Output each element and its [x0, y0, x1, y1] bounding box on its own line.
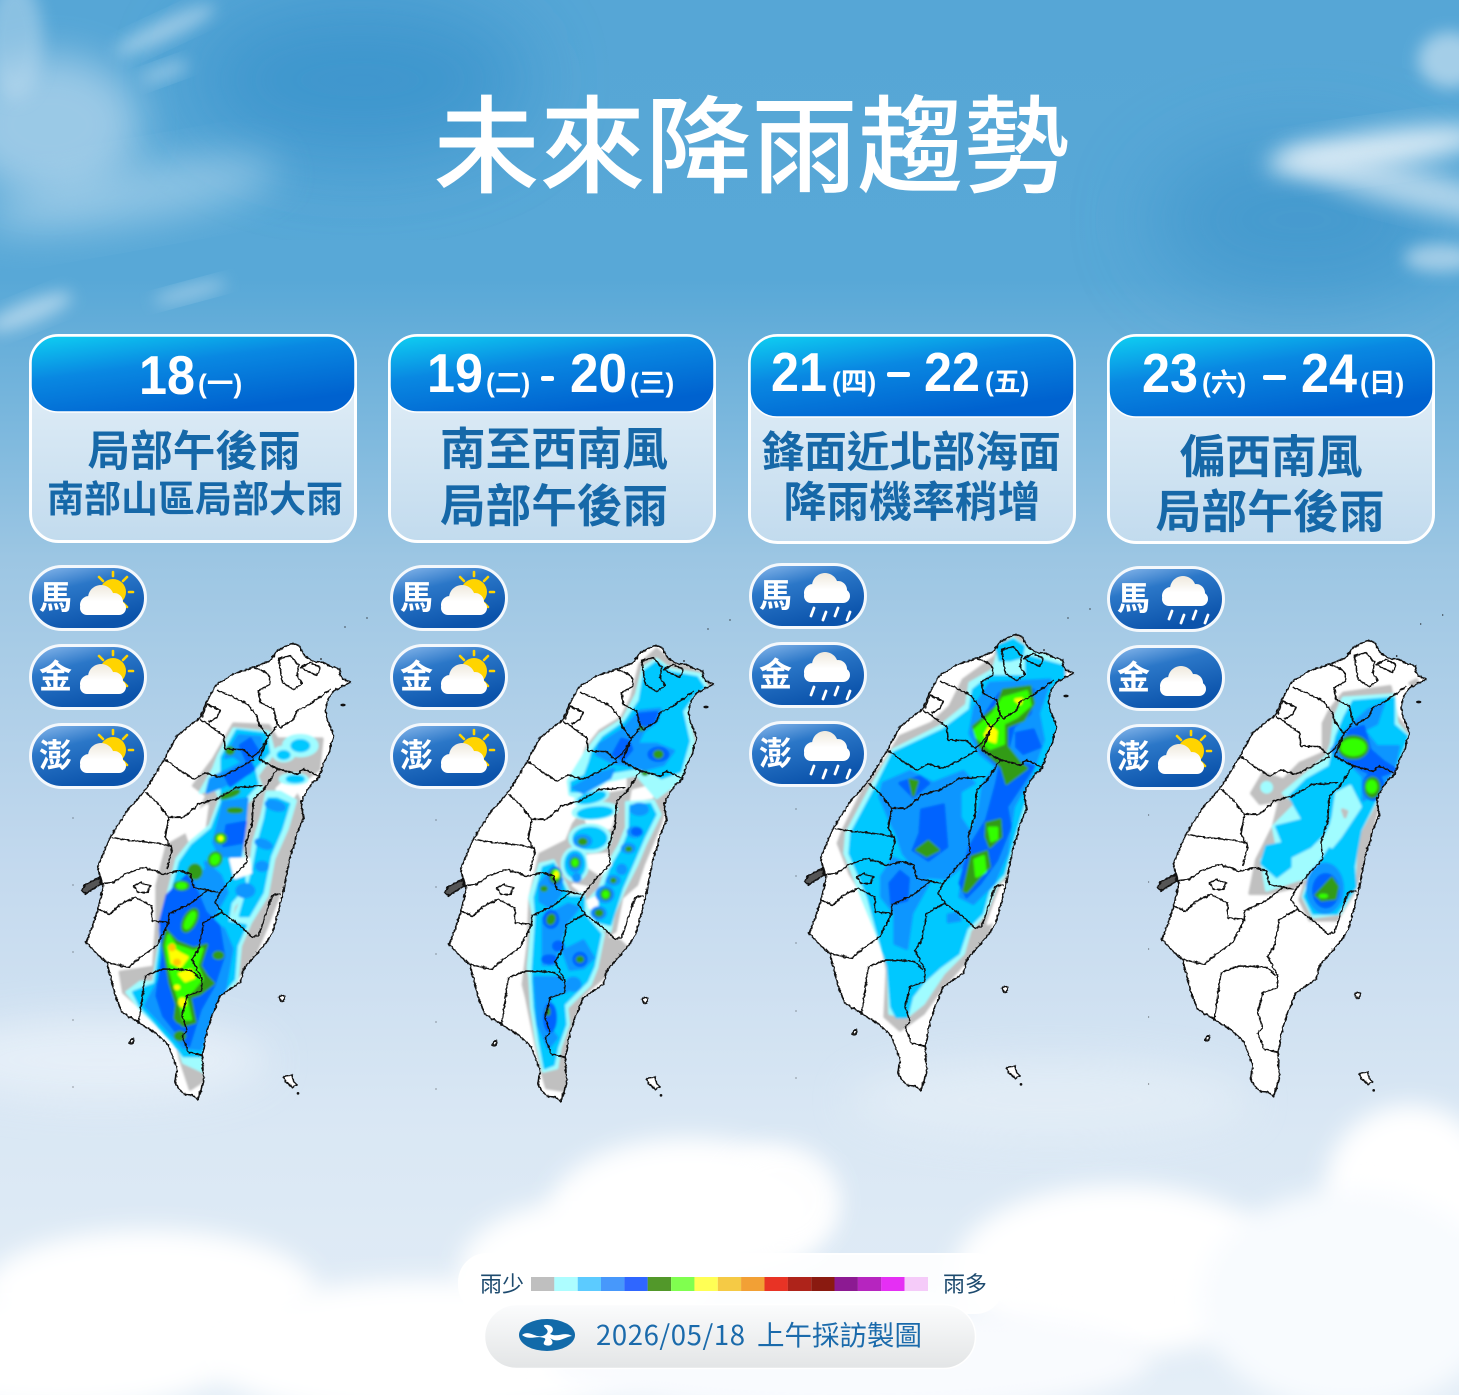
pill: Matsu rain: [750, 564, 866, 628]
label: less rain: 雨少: [480, 1267, 524, 1299]
date label: 19: [427, 342, 483, 404]
date text: 2026/05/18: [596, 1313, 745, 1353]
pill: Kinmen partly cloudy: [30, 646, 146, 708]
date label: 21: [771, 341, 827, 403]
date label: (日): [1360, 368, 1404, 398]
pill: Matsu rain: 馬: [1117, 572, 1150, 620]
date label: 18: [139, 344, 195, 406]
pill: Kinmen cloudy: 金: [1117, 651, 1150, 699]
legend: rainfall colour scale: [459, 1254, 1003, 1313]
pill: Kinmen rain: 金: [759, 648, 792, 696]
pill: Matsu rain: 馬: [759, 569, 792, 617]
date label: (二): [486, 368, 530, 398]
date text: [596, 1313, 922, 1353]
forecast text: 局部午後雨: [440, 470, 668, 536]
pill: Kinmen partly cloudy: [392, 646, 506, 708]
pill: Penghu rain: [750, 722, 866, 786]
date text: 上午採訪製圖: [757, 1313, 922, 1353]
pill: Penghu partly cloudy: 澎: [400, 729, 433, 777]
date label: (六): [1202, 368, 1246, 398]
panel: day 21-22 header card: [750, 336, 1074, 542]
panel: day 23-24 header card: [1108, 336, 1434, 542]
date label: [771, 341, 1029, 403]
panel: day 19-20 header card: [390, 336, 714, 542]
pill: Matsu partly cloudy: 馬: [39, 571, 72, 619]
date label: (五): [985, 367, 1029, 397]
pill: Penghu rain: 澎: [759, 727, 792, 775]
map: rainfall 21-22: [796, 608, 1091, 1091]
forecast text: [440, 413, 668, 536]
pill: Matsu partly cloudy: 馬: [400, 571, 433, 619]
forecast text: 局部午後雨: [1156, 476, 1384, 542]
pill: Penghu partly cloudy: 澎: [1117, 730, 1150, 778]
island weather pills: day 18: [30, 566, 146, 788]
date label: 22: [924, 341, 980, 403]
map: rainfall 18: [73, 617, 368, 1100]
pill: Penghu partly cloudy: [1108, 726, 1224, 788]
pill: Kinmen rain: [750, 644, 866, 706]
date label: 23: [1142, 342, 1198, 404]
date label: (四): [832, 367, 876, 397]
pill: Kinmen cloudy: [1108, 646, 1224, 710]
forecast text: [47, 418, 343, 523]
title: 未來降雨趨勢: [434, 62, 1070, 216]
map: rainfall 23-24: [1148, 614, 1443, 1097]
date label: (三): [630, 368, 674, 398]
forecast text: 降雨機率稍增: [784, 468, 1040, 530]
forecast text: 南部山區局部大雨: [47, 469, 343, 523]
pill: Kinmen partly cloudy: 金: [39, 650, 72, 698]
forecast text: 局部午後雨: [88, 418, 300, 479]
date label: [1142, 342, 1404, 404]
footer: production date: [484, 1304, 976, 1368]
pill: Matsu rain: [1108, 568, 1224, 630]
forecast text: 南至西南風: [440, 413, 668, 479]
icon: weather agency logo: [519, 1319, 575, 1351]
forecast text: 鋒面近北部海面: [761, 418, 1061, 480]
panel: day 18 header card: [30, 336, 356, 542]
island weather pills: day 21-22: [750, 564, 866, 786]
pill: Penghu partly cloudy: 澎: [39, 729, 72, 777]
date label: [427, 342, 674, 404]
pill: Penghu partly cloudy: [392, 724, 506, 788]
colour swatches: [531, 1277, 928, 1291]
pill: Matsu partly cloudy: [392, 566, 506, 630]
pill: Penghu partly cloudy: [30, 724, 146, 788]
pill: Kinmen partly cloudy: 金: [400, 650, 433, 698]
forecast text: 偏西南風: [1179, 421, 1363, 487]
pill: Matsu partly cloudy: [30, 566, 146, 630]
label: more rain: 雨多: [943, 1267, 987, 1299]
forecast text: [761, 418, 1061, 530]
forecast text: [1156, 421, 1384, 542]
date label: 20: [570, 342, 627, 404]
date label: 24: [1301, 342, 1357, 404]
island weather pills: day 19-20: [392, 566, 506, 788]
date label: [139, 344, 242, 406]
map: rainfall 19-20: [436, 619, 731, 1102]
island weather pills: day 23-24: [1108, 568, 1224, 788]
date label: (一): [198, 369, 242, 399]
